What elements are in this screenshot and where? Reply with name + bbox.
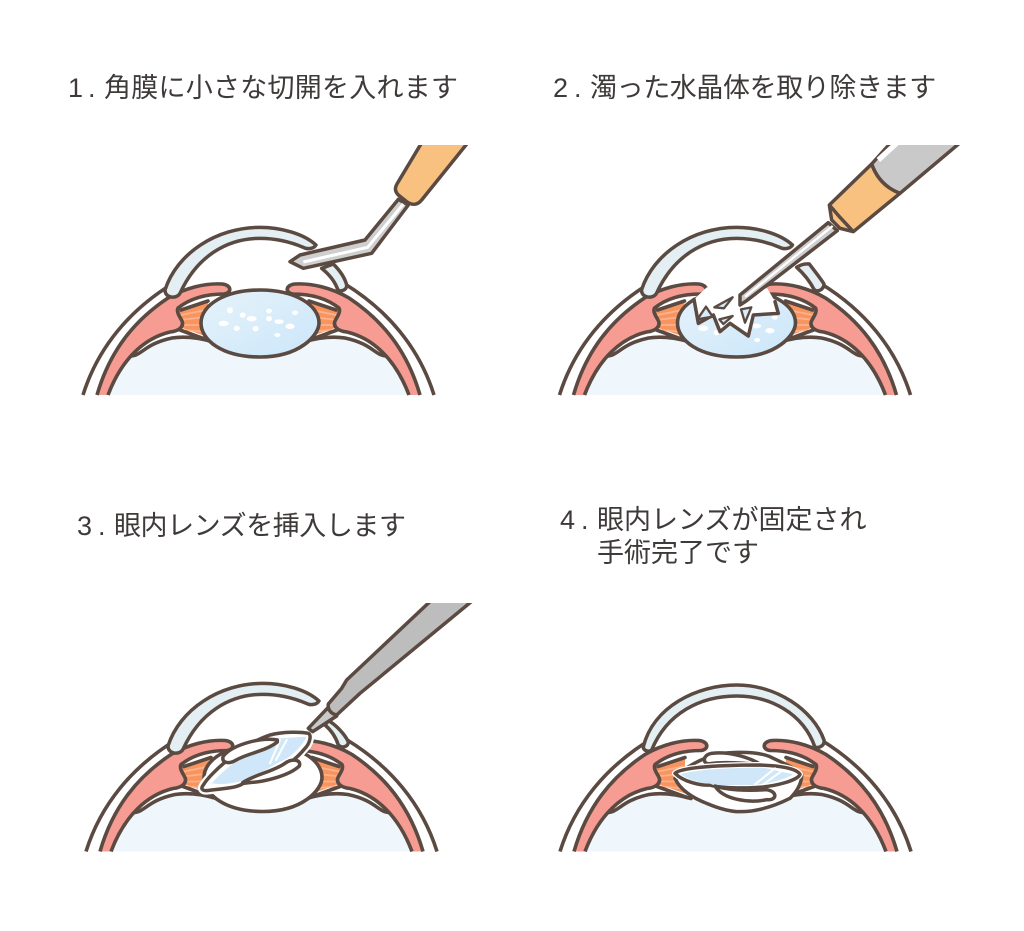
cornea — [165, 227, 347, 297]
eye cross-section — [560, 284, 910, 395]
title: step 3: 3 — [77, 511, 92, 541]
title: step 4: 4 — [560, 505, 575, 535]
intraocular lens being inserted — [202, 732, 310, 791]
title: step 3: . — [98, 511, 106, 541]
lens with remaining particles — [678, 290, 796, 357]
icon: phaco handpiece — [740, 140, 963, 305]
eye cross-section — [560, 740, 911, 852]
title: step 4: . — [581, 505, 589, 535]
cornea lower piece — [325, 721, 348, 747]
title: step 1: 角膜に小さな切開を入れます — [104, 73, 458, 103]
panel: step 3 inserting intraocular lens — [86, 600, 473, 852]
title: step 1: 1 — [68, 73, 83, 103]
icon: scalpel — [290, 140, 470, 268]
cornea — [643, 685, 824, 751]
title: step 2: . — [574, 73, 582, 103]
title: step 2: 2 — [553, 73, 568, 103]
panel: step 1 eye with incision — [83, 140, 470, 395]
title: step 1: . — [88, 73, 96, 103]
title: step 4: 手術完了です — [597, 538, 759, 568]
title: step 2: 濁った水晶体を取り除きます — [590, 73, 936, 103]
empty capsule — [204, 744, 322, 812]
lens fragments — [694, 287, 778, 336]
cloudy lens — [201, 290, 319, 357]
icon: injector — [308, 600, 473, 732]
eye cross-section — [83, 284, 434, 395]
panel: step 2 eye with lens fragmentation — [560, 140, 963, 395]
cornea lower piece — [797, 264, 824, 291]
panel: step 4 lens fixed in place — [560, 685, 911, 852]
title: step 3: 眼内レンズを挿入します — [114, 511, 406, 541]
intraocular lens in capsule — [675, 752, 802, 812]
title: step 4: 眼内レンズが固定され — [597, 505, 866, 535]
cornea — [641, 227, 792, 297]
cornea — [168, 683, 319, 753]
eye cross-section — [86, 740, 437, 852]
